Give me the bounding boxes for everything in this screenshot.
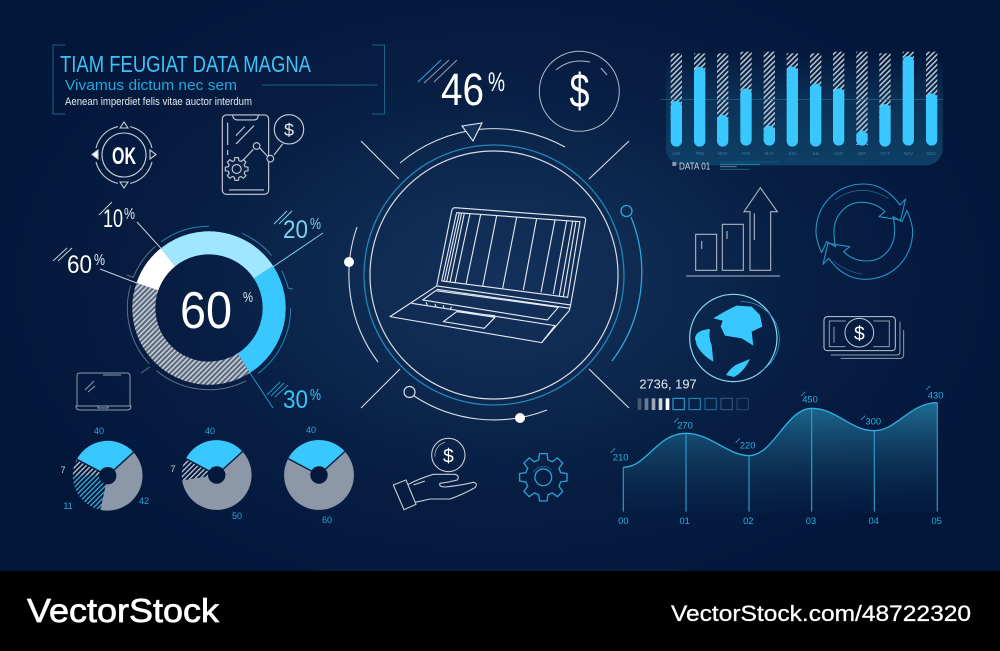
title block: Vivamus dictum nec sem bbox=[65, 77, 237, 94]
label 20% bbox=[273, 211, 323, 267]
segment: light blue 20% bbox=[161, 231, 273, 279]
46 percent stat bbox=[418, 60, 505, 115]
icon: banknotes bbox=[824, 317, 904, 358]
pie chart 2: 50 bbox=[232, 511, 242, 521]
label 30%: 30 bbox=[283, 386, 308, 414]
label 60%: 60 bbox=[67, 251, 92, 279]
axis labels: 05 bbox=[931, 516, 942, 526]
month labels: NOV bbox=[904, 151, 913, 156]
axis labels: 03 bbox=[806, 516, 816, 526]
month labels: SEP bbox=[858, 151, 866, 156]
value labels bbox=[613, 390, 943, 463]
pie chart 3: 40 bbox=[306, 425, 316, 435]
left arc bbox=[344, 227, 378, 362]
title block: TIAM FEUGIAT DATA MAGNA bbox=[60, 51, 312, 77]
icon: OK dial bbox=[92, 122, 156, 188]
counter: 2736, 197 bbox=[639, 376, 697, 391]
pie chart 1: 42 bbox=[139, 496, 149, 506]
gear icon bbox=[520, 454, 567, 501]
pie chart 2 bbox=[170, 426, 252, 521]
title block: Aenean imperdiet felis vitae auctor interdum bbox=[65, 96, 252, 108]
46 percent stat: % bbox=[488, 67, 505, 97]
pie chart 2: 7 bbox=[170, 464, 176, 474]
pie chart 2: 40 bbox=[205, 426, 215, 436]
axis labels: 01 bbox=[679, 516, 690, 526]
icon: OK dial: OK bbox=[112, 143, 136, 170]
label 60% bbox=[53, 248, 137, 283]
footer bar bbox=[0, 571, 1000, 651]
curve line bbox=[623, 403, 937, 467]
axis labels bbox=[618, 516, 942, 526]
icon: small laptop bbox=[76, 373, 131, 410]
footer bar: VectorStock bbox=[27, 592, 220, 629]
blue bars bbox=[671, 56, 937, 147]
label 20%: 20 bbox=[283, 216, 308, 244]
axis labels: 04 bbox=[868, 516, 879, 526]
laptop bbox=[390, 208, 586, 343]
hatched bar backgrounds bbox=[671, 52, 937, 145]
counter bbox=[638, 376, 748, 410]
segment: white 10% bbox=[136, 248, 175, 290]
month labels: JAN bbox=[672, 151, 680, 156]
footer bar: VectorStock.com/48722320 bbox=[671, 601, 971, 626]
pie chart 3: 60 bbox=[322, 515, 332, 525]
icon: cycle arrows bbox=[816, 184, 913, 279]
axis labels: 00 bbox=[618, 516, 629, 526]
donut chart bbox=[53, 202, 323, 414]
label 30% bbox=[250, 373, 321, 414]
month labels: MAY bbox=[765, 151, 774, 156]
legend: DATA 01 bbox=[679, 161, 711, 172]
month labels: DEC bbox=[927, 151, 936, 156]
month labels bbox=[672, 151, 936, 156]
segment: hatched 60% bbox=[132, 283, 250, 385]
pie chart 1 bbox=[60, 426, 149, 511]
legend bbox=[672, 161, 780, 172]
month labels: AUG bbox=[834, 151, 844, 156]
value labels: 450 bbox=[802, 394, 818, 404]
pie chart 1: 40 bbox=[94, 426, 104, 436]
month labels: JUN bbox=[788, 151, 797, 156]
axis labels: 02 bbox=[743, 516, 754, 526]
value labels: 270 bbox=[677, 421, 693, 431]
label 20%: % bbox=[310, 216, 321, 233]
icon: phone with gear and dollar: $ bbox=[284, 120, 294, 140]
vertical guides bbox=[623, 403, 937, 512]
icon: growth bars with arrow bbox=[686, 188, 780, 276]
hand holding coin icon: $ bbox=[443, 446, 454, 467]
top arc with arrow bbox=[400, 123, 565, 163]
label 30%: % bbox=[310, 387, 321, 404]
icon: phone with gear and dollar bbox=[222, 115, 304, 194]
bar chart panel bbox=[660, 52, 943, 172]
title block bbox=[53, 45, 384, 114]
label 60%: % bbox=[94, 252, 105, 269]
axis line bbox=[660, 98, 943, 100]
icon: banknotes: $ bbox=[854, 324, 865, 345]
label 10%: % bbox=[124, 206, 135, 223]
value labels: 300 bbox=[866, 416, 881, 426]
icon: dollar circle: $ bbox=[570, 65, 590, 118]
panel background bbox=[666, 53, 943, 165]
month labels: MAR bbox=[718, 151, 727, 156]
icon: dollar circle bbox=[539, 51, 619, 131]
donut chart: % bbox=[243, 289, 253, 306]
right arc bbox=[612, 206, 642, 361]
area fill bbox=[623, 403, 937, 513]
label 10% bbox=[99, 202, 161, 248]
bottom arc bbox=[404, 386, 547, 423]
hand holding coin icon bbox=[393, 438, 476, 510]
center value: 60 bbox=[180, 282, 232, 340]
donut outer arcs bbox=[127, 226, 293, 390]
month labels: FEB bbox=[695, 151, 704, 156]
area chart bbox=[611, 376, 943, 526]
value labels: 210 bbox=[613, 453, 628, 463]
rings bbox=[364, 145, 624, 405]
pie chart 1: 7 bbox=[60, 465, 66, 475]
icon: globe bbox=[690, 294, 779, 382]
pie chart 1: 11 bbox=[63, 501, 73, 511]
month labels: APR bbox=[742, 151, 750, 156]
central laptop dial bbox=[344, 123, 642, 423]
pie chart 3 bbox=[284, 425, 354, 525]
value labels: 220 bbox=[740, 441, 755, 451]
46 percent stat: 46 bbox=[441, 64, 484, 115]
month labels: JUL bbox=[812, 151, 820, 156]
segment: blue 30% bbox=[238, 266, 286, 373]
label 10%: 10 bbox=[103, 205, 123, 233]
month labels: OCT bbox=[880, 151, 890, 156]
value labels: 430 bbox=[928, 390, 943, 400]
